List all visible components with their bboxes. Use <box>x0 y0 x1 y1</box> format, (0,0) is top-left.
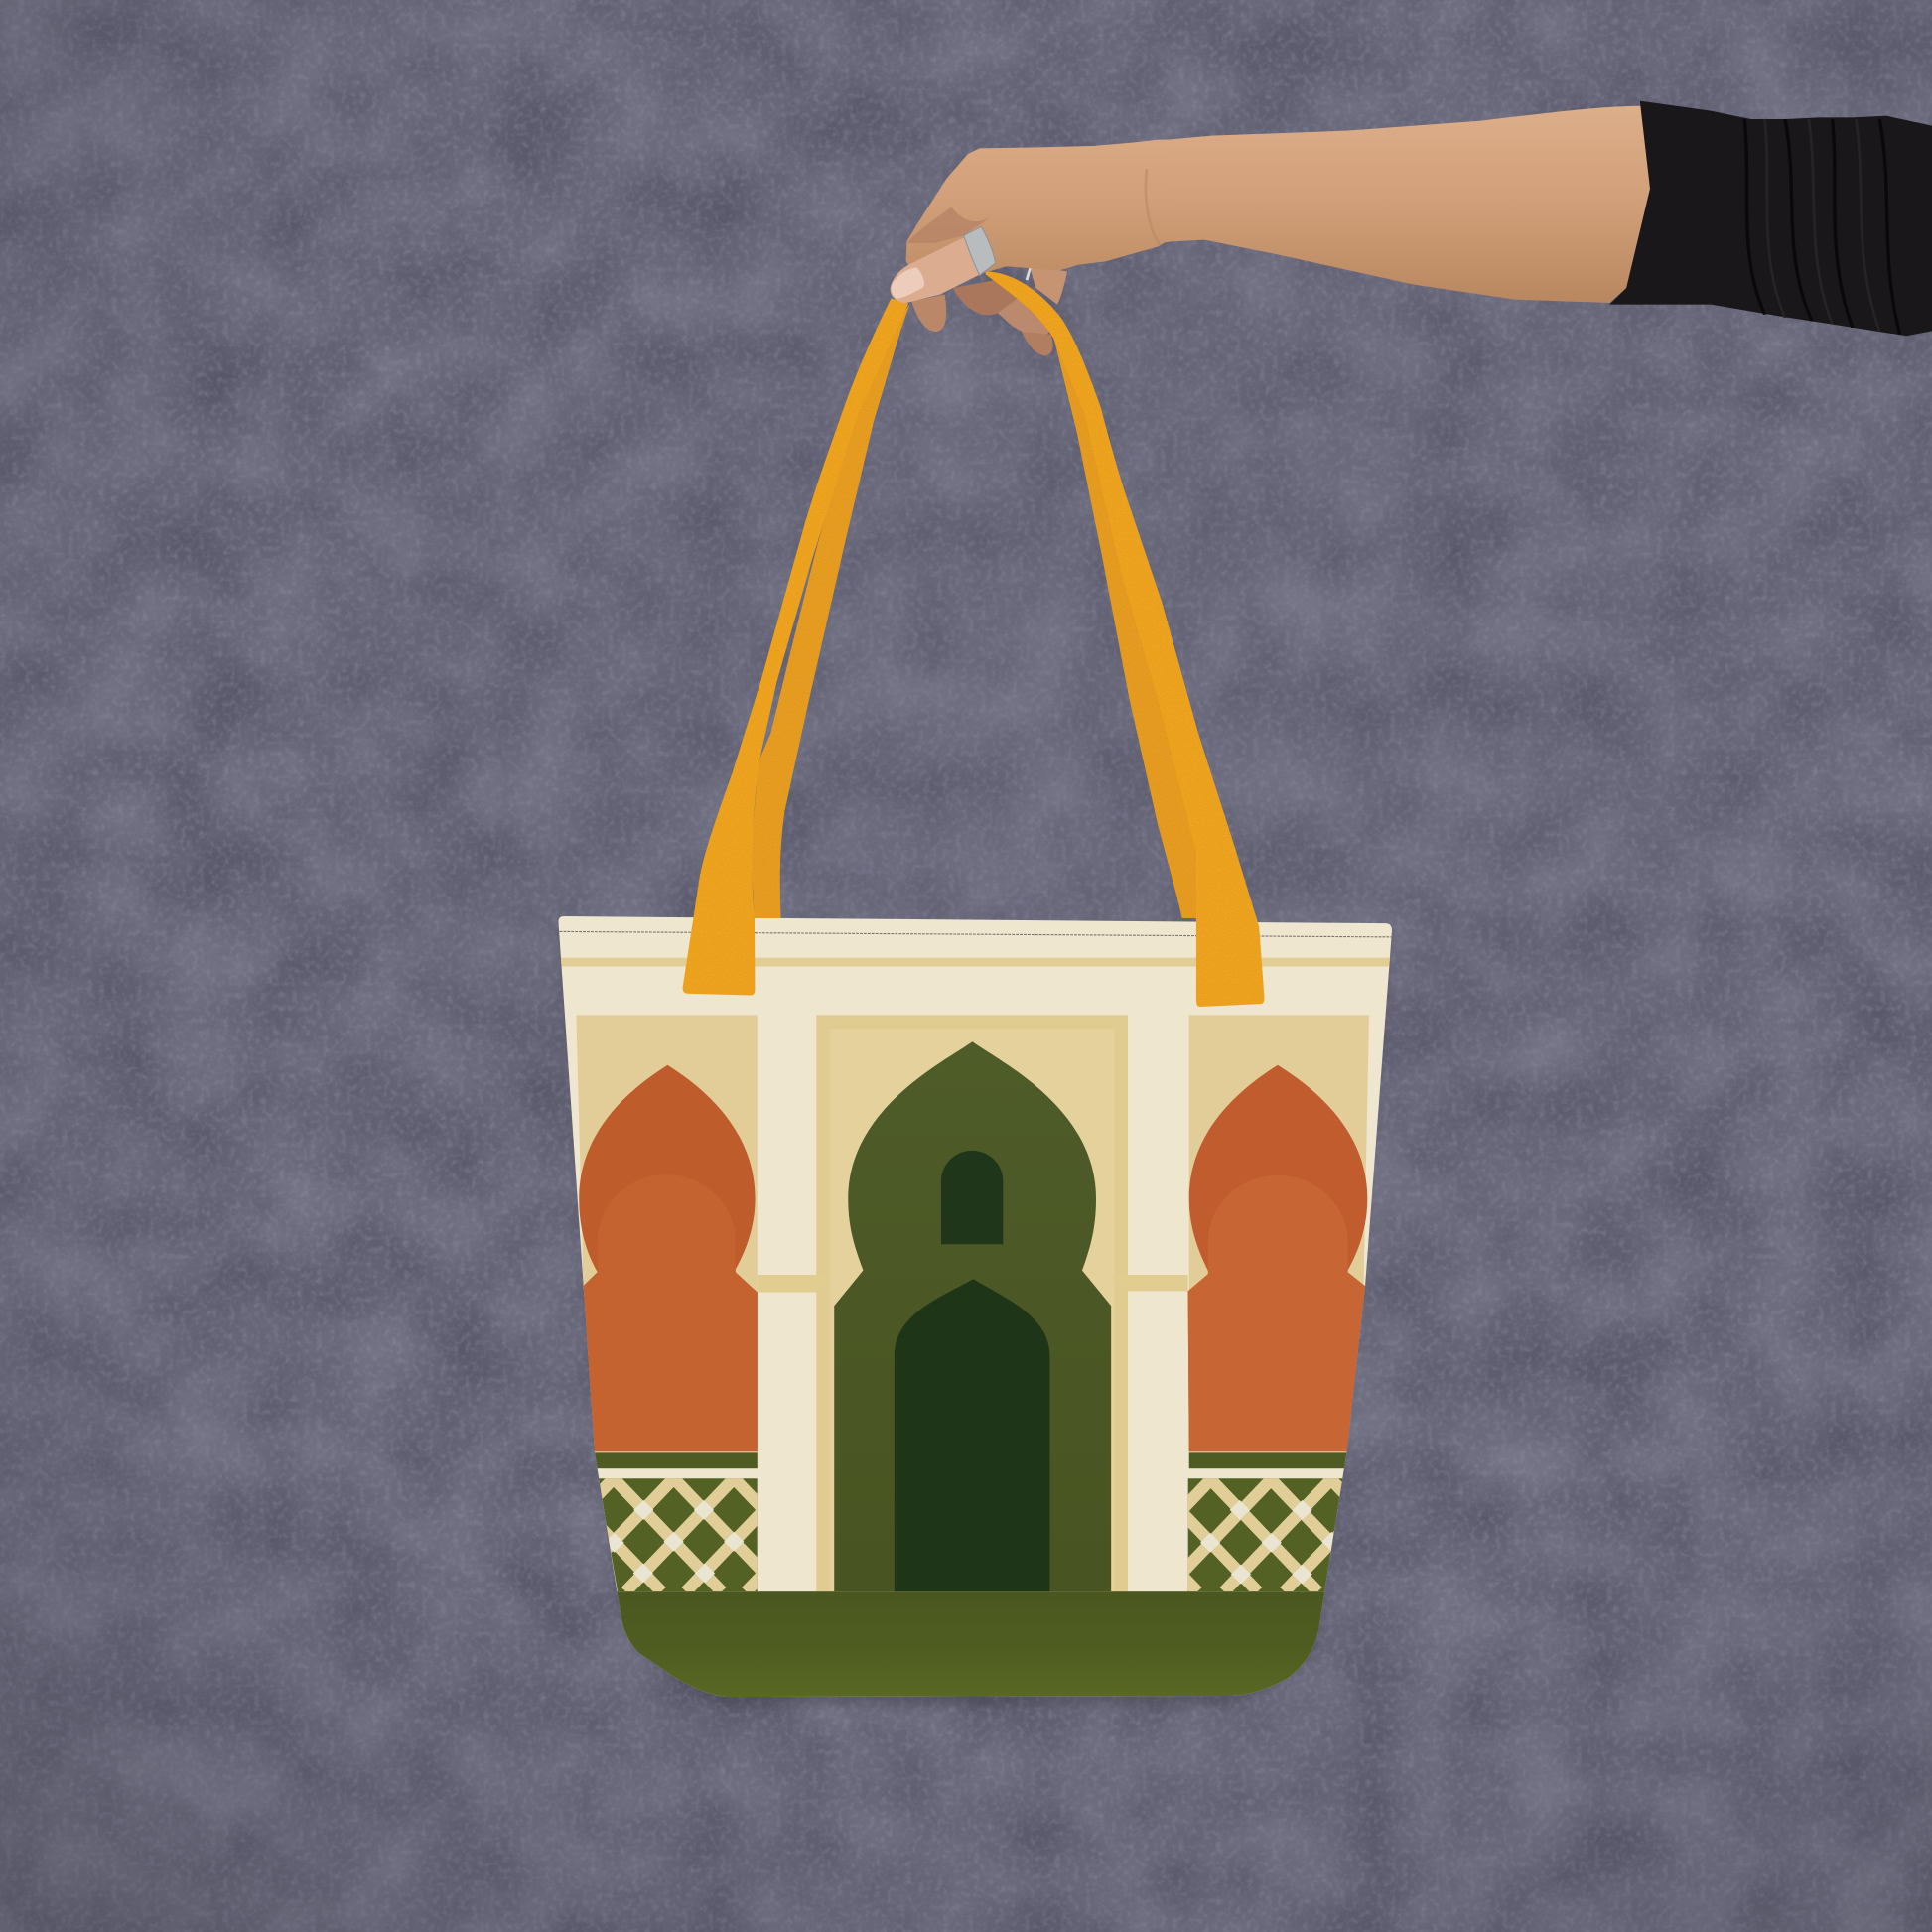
hand and thumb <box>891 140 1172 303</box>
hand: wrist crease <box>1146 169 1160 245</box>
hand: thumb <box>891 237 983 303</box>
arch window <box>941 1151 1003 1244</box>
left lattice <box>493 1478 854 1592</box>
bag shadow <box>558 926 1392 1705</box>
hand: thumbnail <box>892 267 924 299</box>
center green arch <box>834 1041 1111 1591</box>
left inner arch <box>584 1174 758 1451</box>
left panel background <box>576 1015 758 1293</box>
left strap inner strand <box>751 305 909 918</box>
left ledge <box>758 1275 833 1293</box>
back part of the right strap <box>1113 597 1200 918</box>
arch door <box>895 1279 1049 1591</box>
arm: fingers behind the strap <box>911 265 1067 355</box>
bag: top tan stripe <box>558 958 1394 966</box>
right green band <box>1189 1452 1350 1468</box>
center panel frame <box>816 1015 1128 1591</box>
left green band <box>592 1452 758 1468</box>
center panel inner <box>830 1029 1115 1591</box>
hand: palm <box>906 140 1172 288</box>
right strap <box>986 272 1265 1007</box>
bag bottom green band <box>592 1591 1372 1701</box>
right inner arch <box>1188 1175 1366 1451</box>
black sleeve <box>1609 101 1932 336</box>
right arch panel <box>1188 1015 1369 1451</box>
right panel background <box>1189 1015 1369 1293</box>
hand: knuckle shading <box>906 207 992 243</box>
tote bag body <box>558 916 1392 1697</box>
left strap <box>683 298 909 995</box>
right ledge <box>1112 1275 1188 1291</box>
left arch panel <box>576 1015 758 1451</box>
right orange arch <box>1188 1065 1367 1451</box>
left orange arch <box>579 1065 758 1451</box>
hand: silver ring <box>964 226 996 275</box>
right lattice <box>1089 1478 1452 1592</box>
right strap darker fold <box>1054 340 1196 918</box>
bag: cream fabric <box>558 916 1392 1697</box>
left strap outer strand with tab <box>683 298 908 995</box>
forearm <box>1096 106 1650 303</box>
bag: top hem stitching <box>560 931 1392 937</box>
right strap strand with tab <box>986 272 1265 1007</box>
